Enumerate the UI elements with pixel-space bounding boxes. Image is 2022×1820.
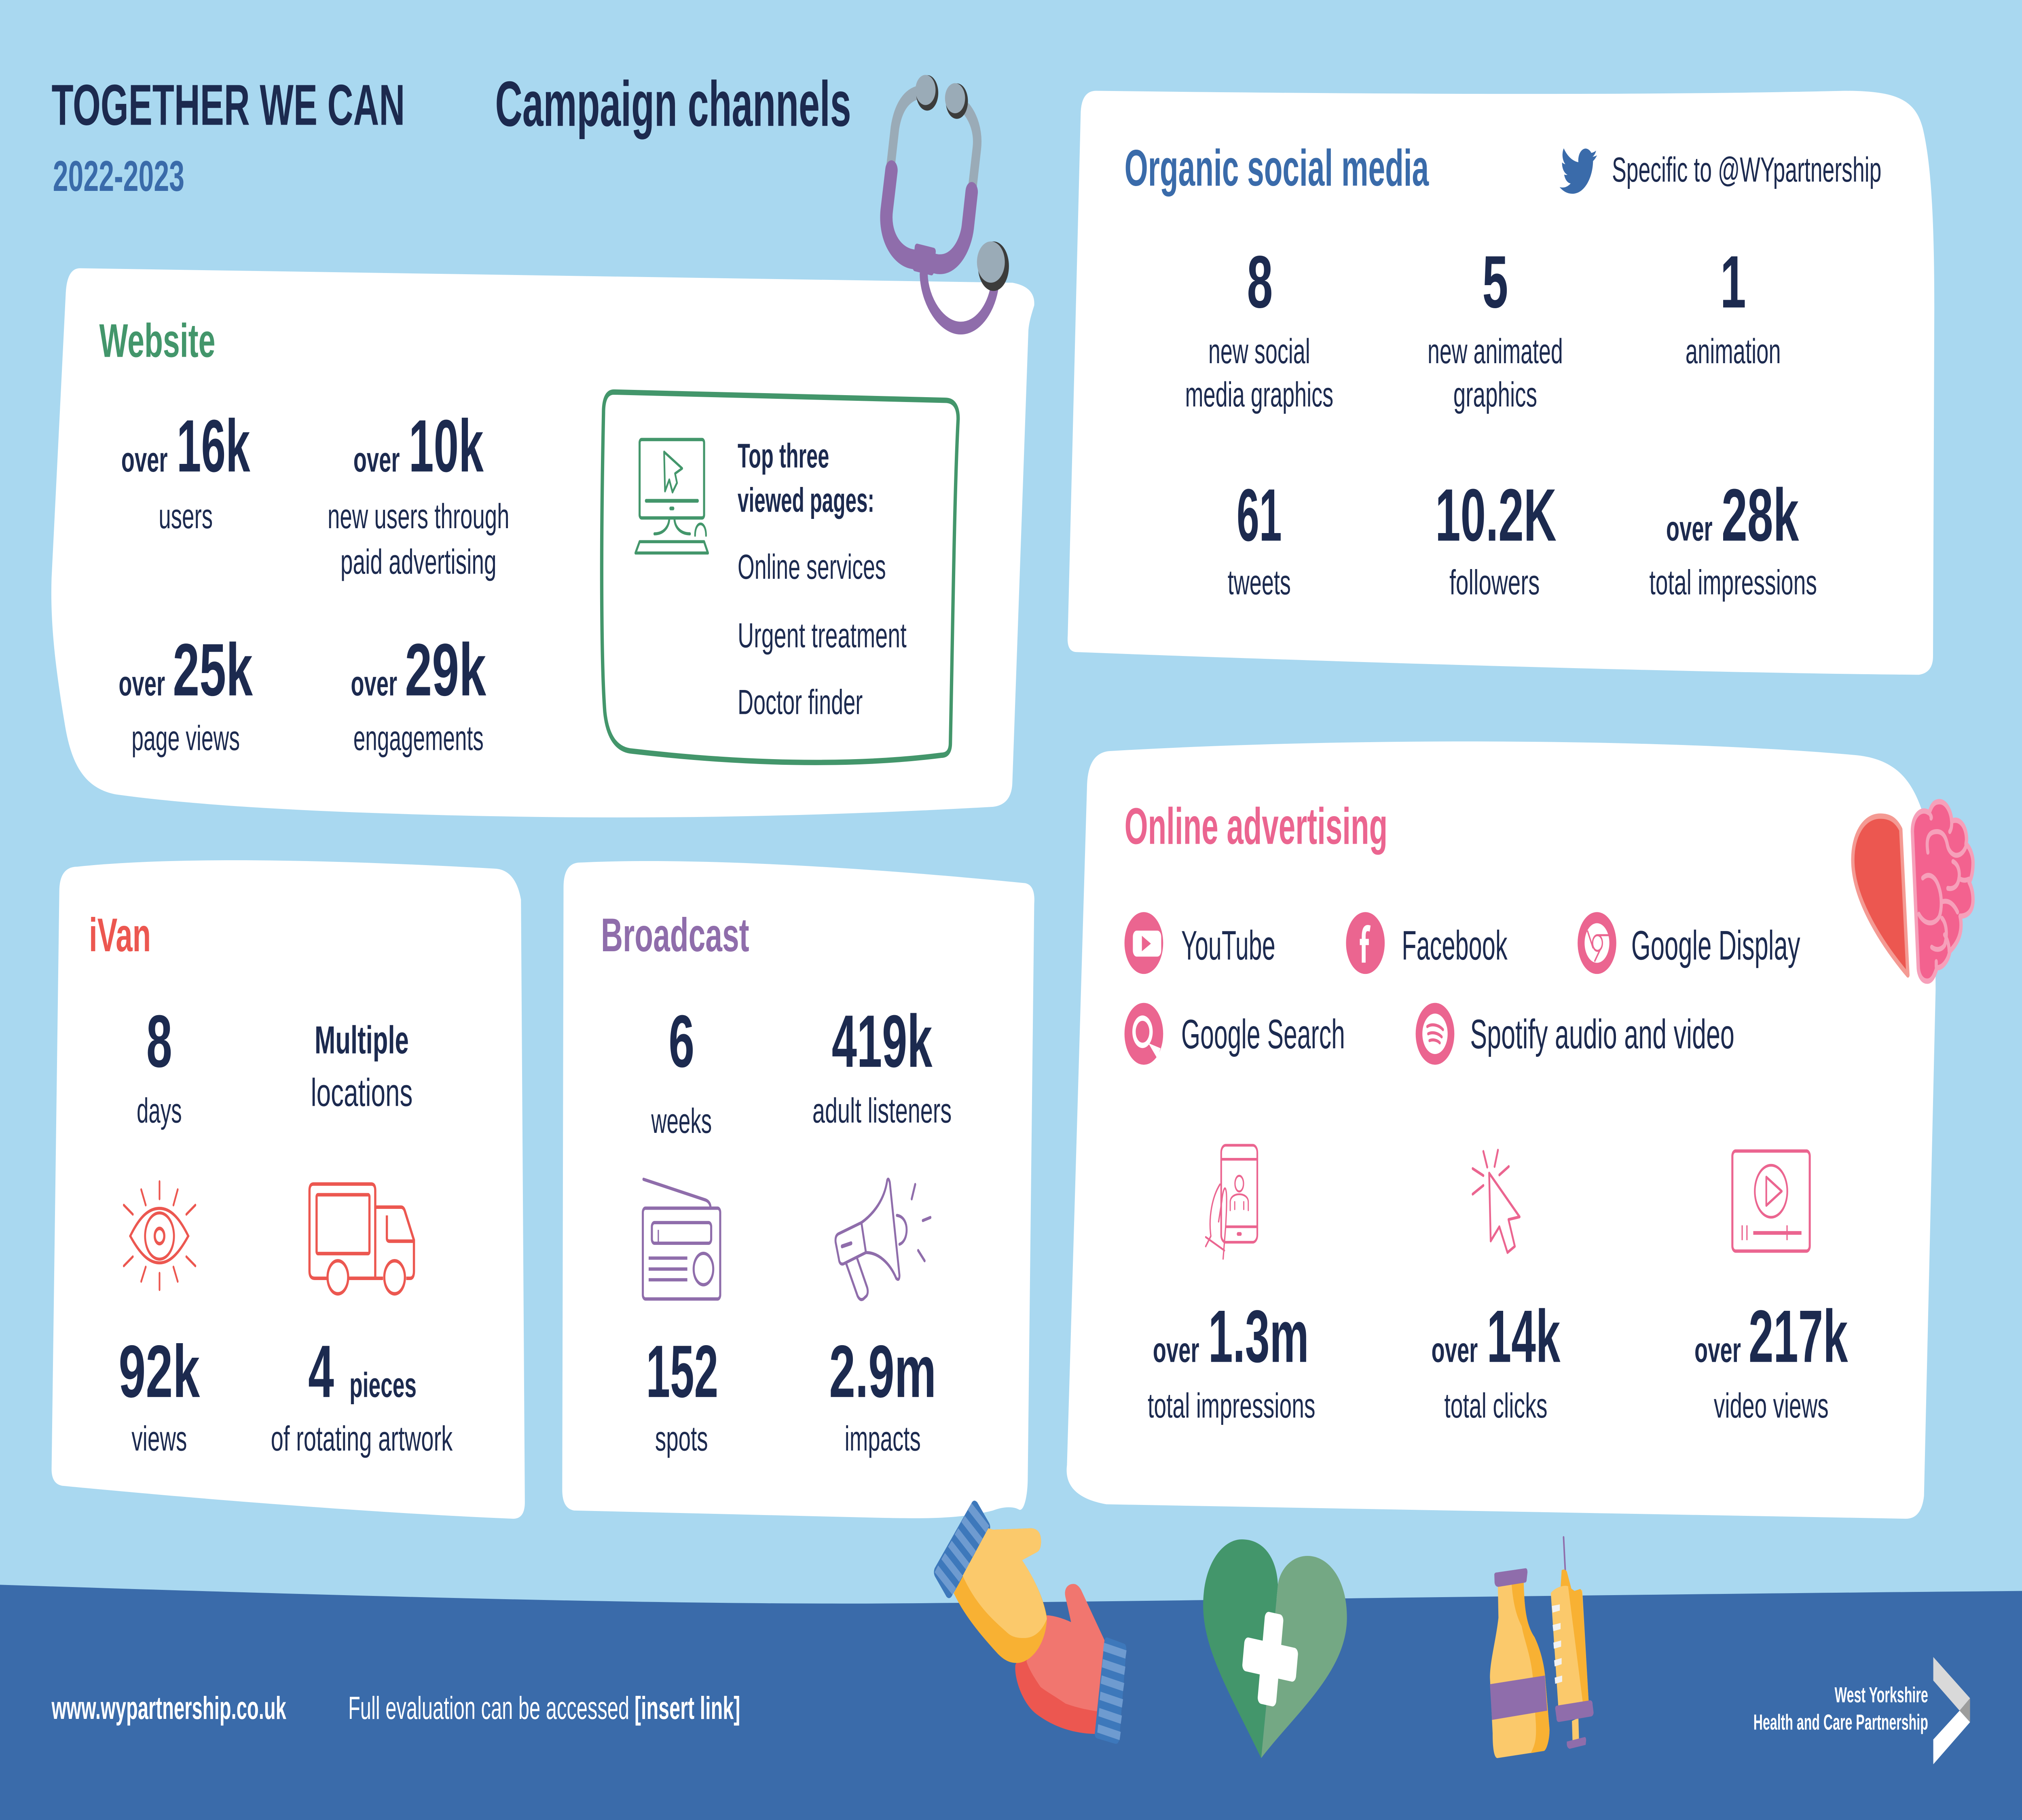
panel: iVan [52,860,525,1519]
text: top three heading: Top three [738,436,829,475]
stat: over 10k new users: new users through [328,497,510,536]
stat: 152 spots: spots [655,1420,708,1458]
channel: Google Display [1578,912,1800,974]
icon: megaphone [835,1179,931,1299]
title: Together We Can: TOGETHER WE CAN [52,73,405,138]
stat: over 14k total clicks: total clicks [1444,1386,1548,1425]
stat: over 25k page views: over [118,665,165,703]
red mitten cuff [1095,1638,1127,1744]
icon: video player [1732,1151,1810,1251]
stat: 5 new animated graphics [1428,241,1563,414]
stat: over 16k users: over [121,440,168,479]
stat: 8 days: 8 [146,1000,172,1083]
footer: evaluation note: Full evaluation can be accessed [348,1690,629,1726]
stat: 61 tweets [1228,474,1291,602]
stat: 61 tweets: tweets [1228,563,1291,602]
stat: 8 new social media graphics [1185,241,1333,414]
stat: 6 weeks: weeks [651,1102,712,1141]
stat: 10.2K followers: followers [1449,563,1540,602]
stat: 2.9m impacts [829,1330,936,1458]
stat: over 14k total clicks [1432,1295,1561,1425]
stat: over 10k new users: paid advertising [341,543,497,582]
channel: Google Display: Google Display [1631,923,1800,969]
panel: online advertising [1067,741,1935,1519]
stat: over 14k total clicks: over [1432,1331,1478,1370]
stat: over 1.3m total impressions: over [1153,1331,1199,1370]
stat: 8 days [137,1000,182,1130]
text: specific to handle: Specific to @WYpartnership [1612,150,1881,189]
stat: 10.2K followers: 10.2K [1435,474,1557,557]
heading: Website: Website [99,314,216,367]
footer: evaluation note: [insert link] [635,1690,740,1726]
icon: heart with plaster [1203,1539,1347,1758]
heading: Broadcast: Broadcast [601,908,749,961]
text: page list: Urgent treatment [738,616,907,655]
icon: mittens holding [934,1500,1127,1744]
stat: over 28k total impressions: total impressions [1649,563,1817,602]
stat: 2.9m impacts: impacts [845,1420,921,1458]
stat: over 25k page views: page views [131,719,240,758]
channel: YouTube: YouTube [1181,923,1275,969]
stat: 152 spots: 152 [646,1330,718,1413]
icon: eye [124,1181,195,1290]
stat: over 1.3m total impressions: 1.3m [1208,1295,1309,1378]
text: page list [738,548,907,722]
stat: 5 new animated graphics: 5 [1482,241,1508,324]
icon: hand holding phone [1206,1145,1257,1259]
footer: website link: www.wypartnership.co.uk [51,1690,286,1726]
stat: 5 new animated graphics: graphics [1453,375,1537,414]
stat: over 14k total clicks: 14k [1487,1295,1561,1378]
stat: over 28k total impressions [1649,474,1817,602]
stat: 10.2K followers [1435,474,1557,602]
subtitle: year: 2022-2023 [53,152,184,200]
stat: over 28k total impressions: 28k [1722,474,1799,557]
stat: over 29k engagements: 29k [405,629,486,711]
icon: van [309,1184,414,1294]
icon: computer with cursor [635,440,708,553]
stat: 92k views [118,1330,200,1458]
logo: West Yorkshire Health and Care Partnership: West Yorkshire [1835,1683,1928,1707]
stat: multiple locations [311,1018,412,1115]
syringe [1551,1537,1594,1749]
heading: Online advertising: Online advertising [1125,798,1387,855]
stat: multiple locations: locations [311,1071,412,1115]
stat: over 10k new users [328,404,510,582]
red mitten [1015,1584,1104,1734]
stat: 1 animation: 1 [1720,241,1746,324]
text: page list: Doctor finder [738,683,863,722]
stat: 4 pieces of rotating artwork: 4 [308,1330,334,1413]
stat: over 1.3m total impressions [1148,1295,1316,1425]
stat: over 28k total impressions: over [1666,510,1713,548]
icon: radio [643,1179,720,1299]
stat: over 10k new users: 10k [409,404,484,487]
text: top three heading: viewed pages: [738,481,874,519]
yellow mitten cuff [934,1500,990,1598]
channel: Spotify: Spotify audio and video [1470,1012,1734,1058]
stat: 92k views: 92k [118,1330,200,1413]
channel: Google Search [1125,1003,1345,1065]
stat: over 16k users: users [159,497,213,536]
channel: Google Search: Google Search [1181,1012,1345,1058]
stat: 92k views: views [131,1420,187,1458]
channel: Spotify [1416,1003,1734,1065]
heading: Campaign channels: Campaign channels [495,68,851,140]
panel: organic social media [1068,91,1934,675]
stat: over 25k page views [118,629,253,758]
stat: 4 pieces of rotating artwork: of rotating artwork [271,1420,453,1458]
stat: over 25k page views: 25k [173,629,253,711]
icon: heart and brain [1853,802,1973,981]
heading: iVan: iVan [89,908,151,961]
icon: bottle and syringe [1490,1537,1594,1758]
channel: YouTube [1125,912,1275,974]
stat: multiple locations: Multiple [315,1018,409,1062]
stat: 152 spots [646,1330,718,1458]
channel: Facebook: Facebook [1402,923,1508,969]
callout: top three viewed pages [602,392,958,762]
stat: 61 tweets: 61 [1237,474,1282,557]
stat: 4 pieces of rotating artwork [271,1330,453,1458]
logo: West Yorkshire Health and Care Partnership [1753,1657,1970,1764]
stat: 6 weeks [651,1000,712,1141]
stat: 1 animation [1686,241,1781,371]
stat: 419k adult listeners: 419k [832,1000,933,1083]
stat: over 217k video views [1694,1295,1848,1425]
stat: over 1.3m total impressions: total impressions [1148,1386,1316,1425]
panel: website [51,268,1034,817]
stat: 2.9m impacts: 2.9m [829,1330,936,1413]
stat: over 29k engagements: over [351,665,397,703]
stat: over 29k engagements [351,629,486,758]
stat: over 10k new users: over [353,440,400,479]
stat: over 16k users: 16k [177,404,250,487]
stat: 8 new social media graphics: new social [1208,332,1310,371]
icon: clicking cursor [1473,1150,1520,1253]
text: top three heading [738,436,874,519]
stat: over 217k video views: 217k [1749,1295,1848,1378]
stat: 6 weeks: 6 [668,1000,694,1083]
stat: over 217k video views: over [1694,1331,1741,1370]
stat: 4 pieces of rotating artwork: pieces [349,1366,417,1405]
stat: over 217k video views: video views [1714,1386,1829,1425]
channel: Facebook [1346,912,1508,974]
heading: Organic social media: Organic social media [1125,139,1429,197]
logo: West Yorkshire Health and Care Partnership: Health and Care Partnership [1753,1711,1928,1735]
text: page list: Online services [738,548,886,586]
stat: 8 new social media graphics: 8 [1247,241,1273,324]
panel: broadcast [562,861,1034,1518]
stat: 1 animation: animation [1686,332,1781,371]
stat: over 16k users [121,404,250,536]
stat: 8 days: days [137,1092,182,1130]
bottle [1490,1568,1550,1758]
stat: over 29k engagements: engagements [353,719,484,758]
stat: 419k adult listeners [812,1000,952,1130]
yellow mitten [954,1528,1047,1663]
icon: stethoscope [886,75,1009,328]
footer band [0,1585,2022,1820]
stat: 5 new animated graphics: new animated [1428,332,1563,371]
stat: 419k adult listeners: adult listeners [812,1092,952,1130]
stat: 8 new social media graphics: media graphics [1185,375,1333,414]
icon: twitter bird [1559,146,1597,197]
